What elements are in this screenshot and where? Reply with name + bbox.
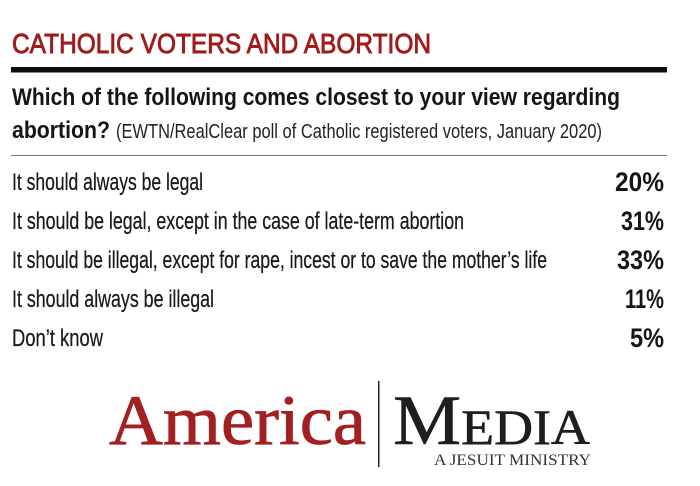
question text: abortion? — [12, 117, 110, 144]
row: legal except late-term: It should be legal, except in the case of late-term abortion — [12, 208, 464, 235]
row: always legal: 20% — [615, 167, 664, 197]
logo word: America: America — [109, 382, 366, 460]
title: CATHOLIC VOTERS AND ABORTION — [12, 28, 431, 59]
row: always legal: It should always be legal — [12, 169, 203, 196]
logo: America Media — [109, 381, 591, 469]
row: illegal except rape, incest, life: 33% — [617, 245, 664, 275]
logo divider — [378, 381, 380, 467]
row: don't know — [12, 323, 664, 353]
thin rule above responses — [11, 155, 667, 156]
row: always illegal: It should always be illegal — [12, 286, 214, 313]
row: don't know: Don’t know — [12, 325, 104, 352]
row: always legal — [12, 167, 664, 197]
heavy rule under title — [11, 67, 667, 72]
row: legal except late-term: 31% — [621, 206, 664, 236]
logo tagline: A JESUIT MINISTRY — [434, 452, 591, 469]
response rows — [12, 167, 664, 353]
row: always illegal — [12, 284, 664, 314]
question text — [12, 84, 620, 144]
row: always illegal: 11% — [625, 284, 664, 314]
row: don't know: 5% — [630, 323, 664, 353]
question text: (EWTN/RealClear poll of Catholic registered voters, January 2020) — [116, 121, 602, 143]
logo word: Media: MEDIA — [393, 382, 590, 460]
question text: Which of the following comes closest to your view regarding — [12, 84, 620, 111]
